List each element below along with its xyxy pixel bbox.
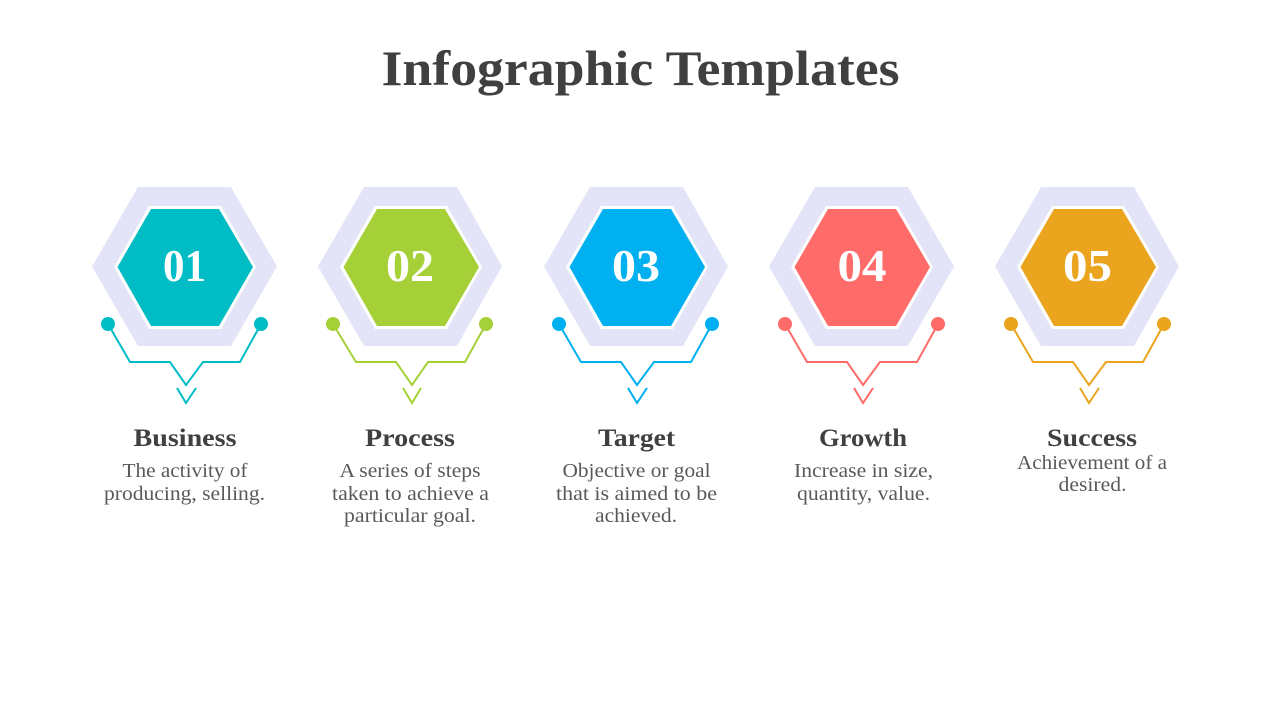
connector arrow 04 [778, 317, 945, 403]
text: Process description: particular goal. [344, 505, 476, 527]
text: Target description: achieved. [595, 505, 677, 527]
text: Process description: taken to achieve a [332, 483, 489, 505]
text: Growth description: quantity, value. [797, 483, 930, 505]
icon: hexagon 02: 02 [386, 240, 434, 291]
text: Growth description [794, 460, 933, 505]
icon: hexagon 03 [544, 187, 728, 346]
heading: Business: Business [134, 425, 237, 452]
text: Process description: A series of steps [340, 460, 481, 482]
icon: hexagon 03: 03 [612, 240, 660, 291]
panel: 04 Growth [769, 187, 954, 505]
text: Business description: The activity of [122, 460, 248, 482]
heading: Process: Process [365, 425, 455, 452]
panel: 03 Target [544, 187, 728, 527]
icon: hexagon 01 [92, 187, 277, 346]
text: Process description [332, 460, 489, 527]
icon: hexagon 04: 04 [838, 240, 886, 291]
text: Success description: Achievement of a [1017, 452, 1167, 474]
panel: 02 Process [318, 187, 502, 527]
icon: hexagon 04 [769, 187, 954, 346]
heading: Success: Success [1047, 425, 1137, 452]
icon: hexagon 01: 01 [163, 240, 206, 291]
text: Success description [1017, 452, 1167, 496]
panel: 05 Success [995, 187, 1179, 496]
text: Business description: producing, selling. [104, 483, 265, 505]
title: Infographic Templates [382, 40, 900, 96]
icon: hexagon 05 [995, 187, 1179, 346]
connector arrow 03 [552, 317, 719, 403]
panel: 01 Business [92, 187, 277, 505]
heading: Target: Target [598, 425, 676, 452]
text: Success description: desired. [1058, 474, 1126, 496]
connector arrow 01 [101, 317, 268, 403]
text: Business description [104, 460, 265, 505]
icon: hexagon 05: 05 [1063, 240, 1112, 291]
heading: Growth: Growth [819, 425, 907, 452]
connector arrow 02 [326, 317, 493, 403]
text: Target description: that is aimed to be [556, 483, 717, 505]
text: Target description [556, 460, 717, 527]
connector arrow 05 [1004, 317, 1171, 403]
icon: hexagon 02 [318, 187, 502, 346]
text: Target description: Objective or goal [562, 460, 711, 482]
text: Growth description: Increase in size, [794, 460, 933, 482]
